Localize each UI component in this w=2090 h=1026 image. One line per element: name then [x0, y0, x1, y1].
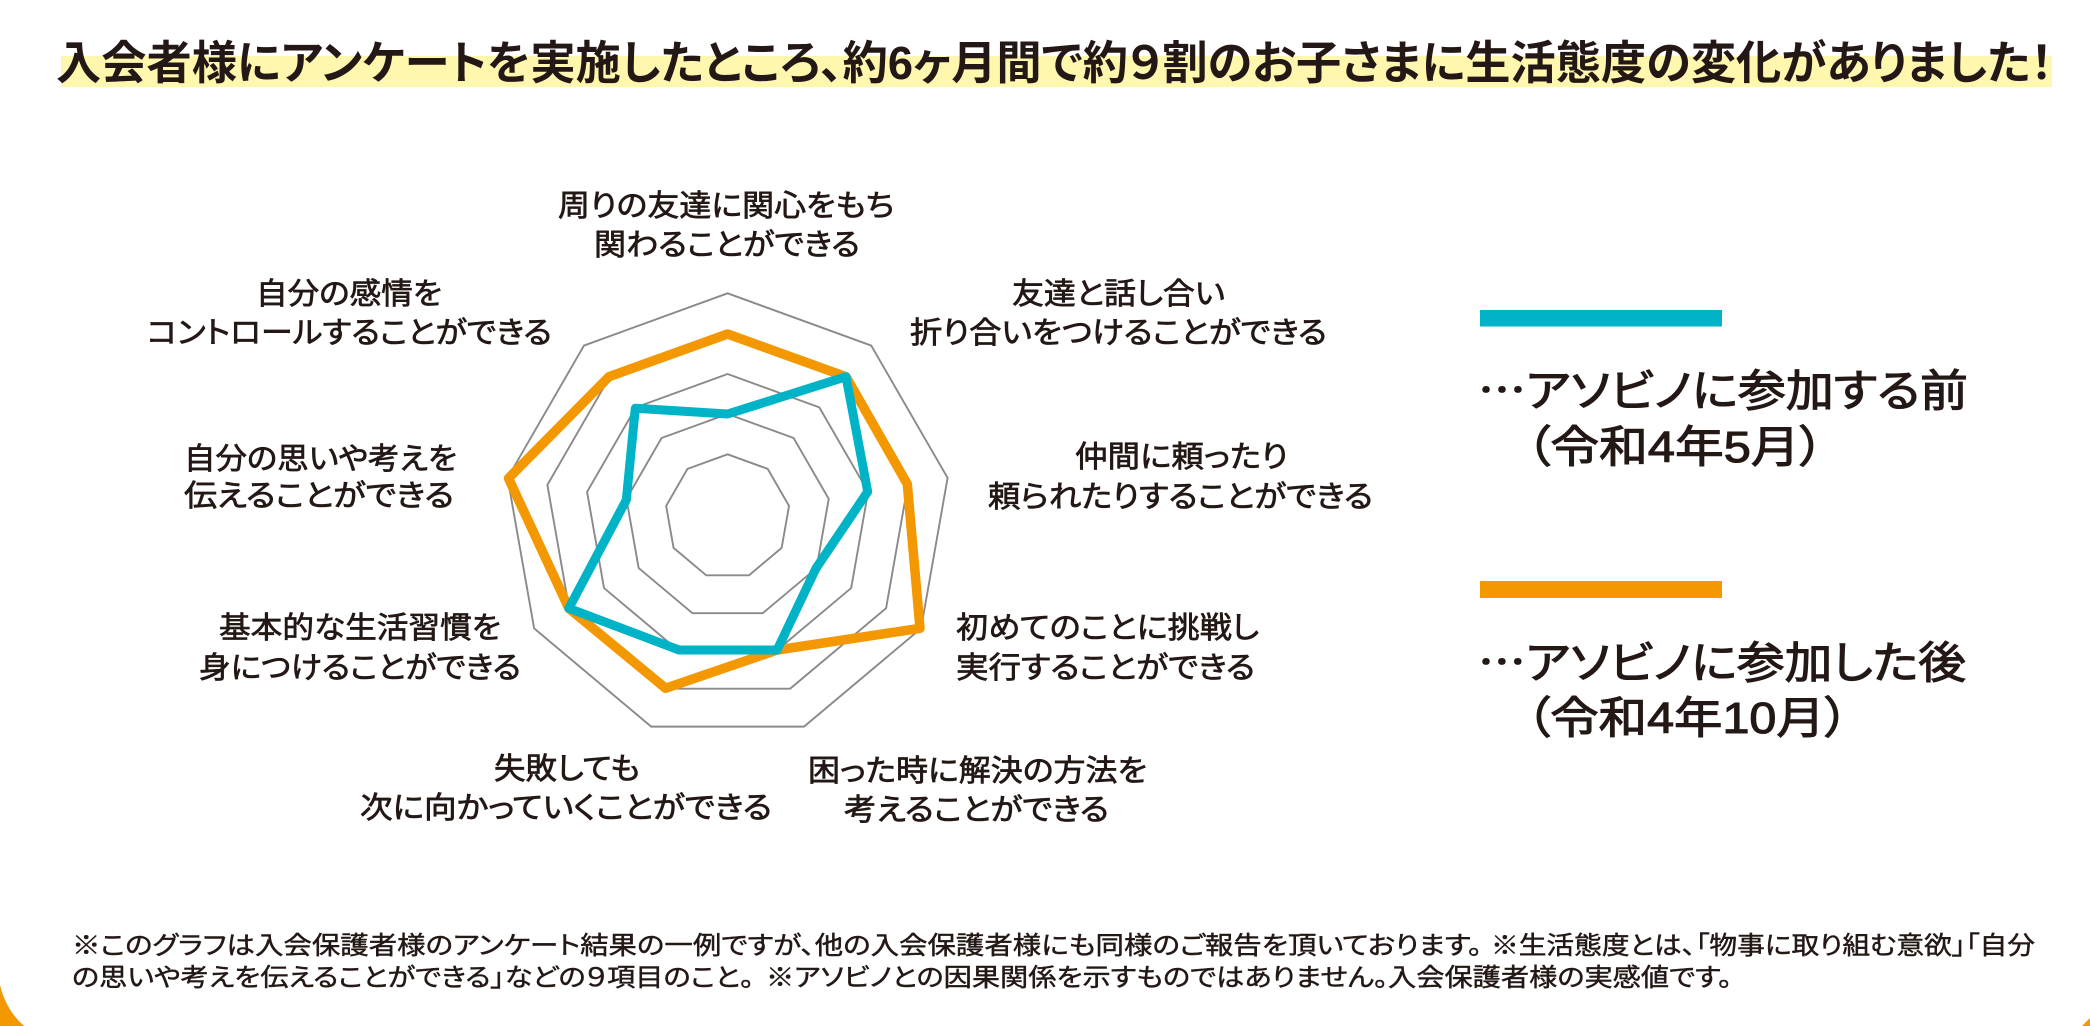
axis label: lower left: 身につけることができる — [199, 652, 521, 685]
axis label: bottom right: 考えることができる — [844, 794, 1109, 827]
axis label: upper right — [910, 278, 1327, 350]
axis label: bottom right: 困った時に解決の方法を — [808, 755, 1147, 788]
teal series: before joining — [569, 377, 868, 650]
axis label: lower right — [956, 612, 1259, 685]
corner: bottom left — [0, 985, 24, 1026]
legend: after — [1478, 581, 1966, 743]
footnote: ※生活態度とは、「物事に取り組む意欲」「自分 — [1491, 932, 2035, 960]
axis label: left — [184, 443, 457, 513]
footnote: の思いや考えを伝えることができる」などの９項目のこと。 — [72, 964, 754, 992]
legend: before — [1478, 310, 1968, 472]
radar chart — [508, 293, 948, 727]
axis label: upper left — [147, 278, 552, 350]
title: 入会者様にアンケートを実施したところ、約6ヶ月間で約９割のお子さまに生活態度の変化がありました！ — [56, 37, 2053, 89]
axis label: upper right: 友達と話し合い — [1012, 278, 1225, 311]
axis label: right — [988, 441, 1373, 514]
axis label: top — [558, 190, 894, 262]
axis label: left: 伝えることができる — [184, 480, 454, 513]
axis label: lower left — [199, 612, 521, 685]
footnote: ※このグラフは入会保護者様のアンケート結果の一例ですが、他の入会保護者様にも同様のご報告を頂いております。 — [72, 932, 1482, 960]
axis label: lower left: 基本的な生活習慣を — [219, 612, 501, 645]
axis label: bottom left — [360, 753, 772, 825]
axis label: bottom right — [808, 755, 1147, 827]
axis label: upper left: 自分の感情を — [256, 278, 442, 311]
footnote: ※アソビノとの因果関係を示すものではありません。入会保護者様の実感値です。 — [766, 964, 1732, 992]
axis label: upper left: コントロールすることができる — [147, 317, 552, 350]
chart grid — [508, 293, 948, 727]
axis label: left: 自分の思いや考えを — [184, 443, 457, 476]
corner: bottom right — [2082, 1018, 2090, 1026]
orange series: after joining — [508, 334, 920, 688]
axis label: right: 仲間に頼ったり — [1075, 441, 1288, 474]
legend: after: …アソビノに参加した後 — [1478, 627, 1966, 691]
footnote — [72, 932, 2035, 992]
axis label: bottom left: 失敗しても — [494, 753, 640, 786]
axis label: top: 関わることができる — [594, 229, 860, 262]
legend: after: （令和4年10月） — [1526, 694, 1849, 743]
axis label: upper right: 折り合いをつけることができる — [910, 317, 1327, 350]
axis label: top: 周りの友達に関心をもち — [558, 190, 894, 223]
axis label: lower right: 実行することができる — [956, 652, 1255, 685]
axis label: right: 頼られたりすることができる — [988, 481, 1373, 514]
axis label: bottom left: 次に向かっていくことができる — [360, 792, 772, 825]
axis label: lower right: 初めてのことに挑戦し — [956, 612, 1259, 645]
legend: before: …アソビノに参加する前 — [1478, 355, 1968, 419]
legend: before: （令和4年5月） — [1526, 423, 1824, 472]
